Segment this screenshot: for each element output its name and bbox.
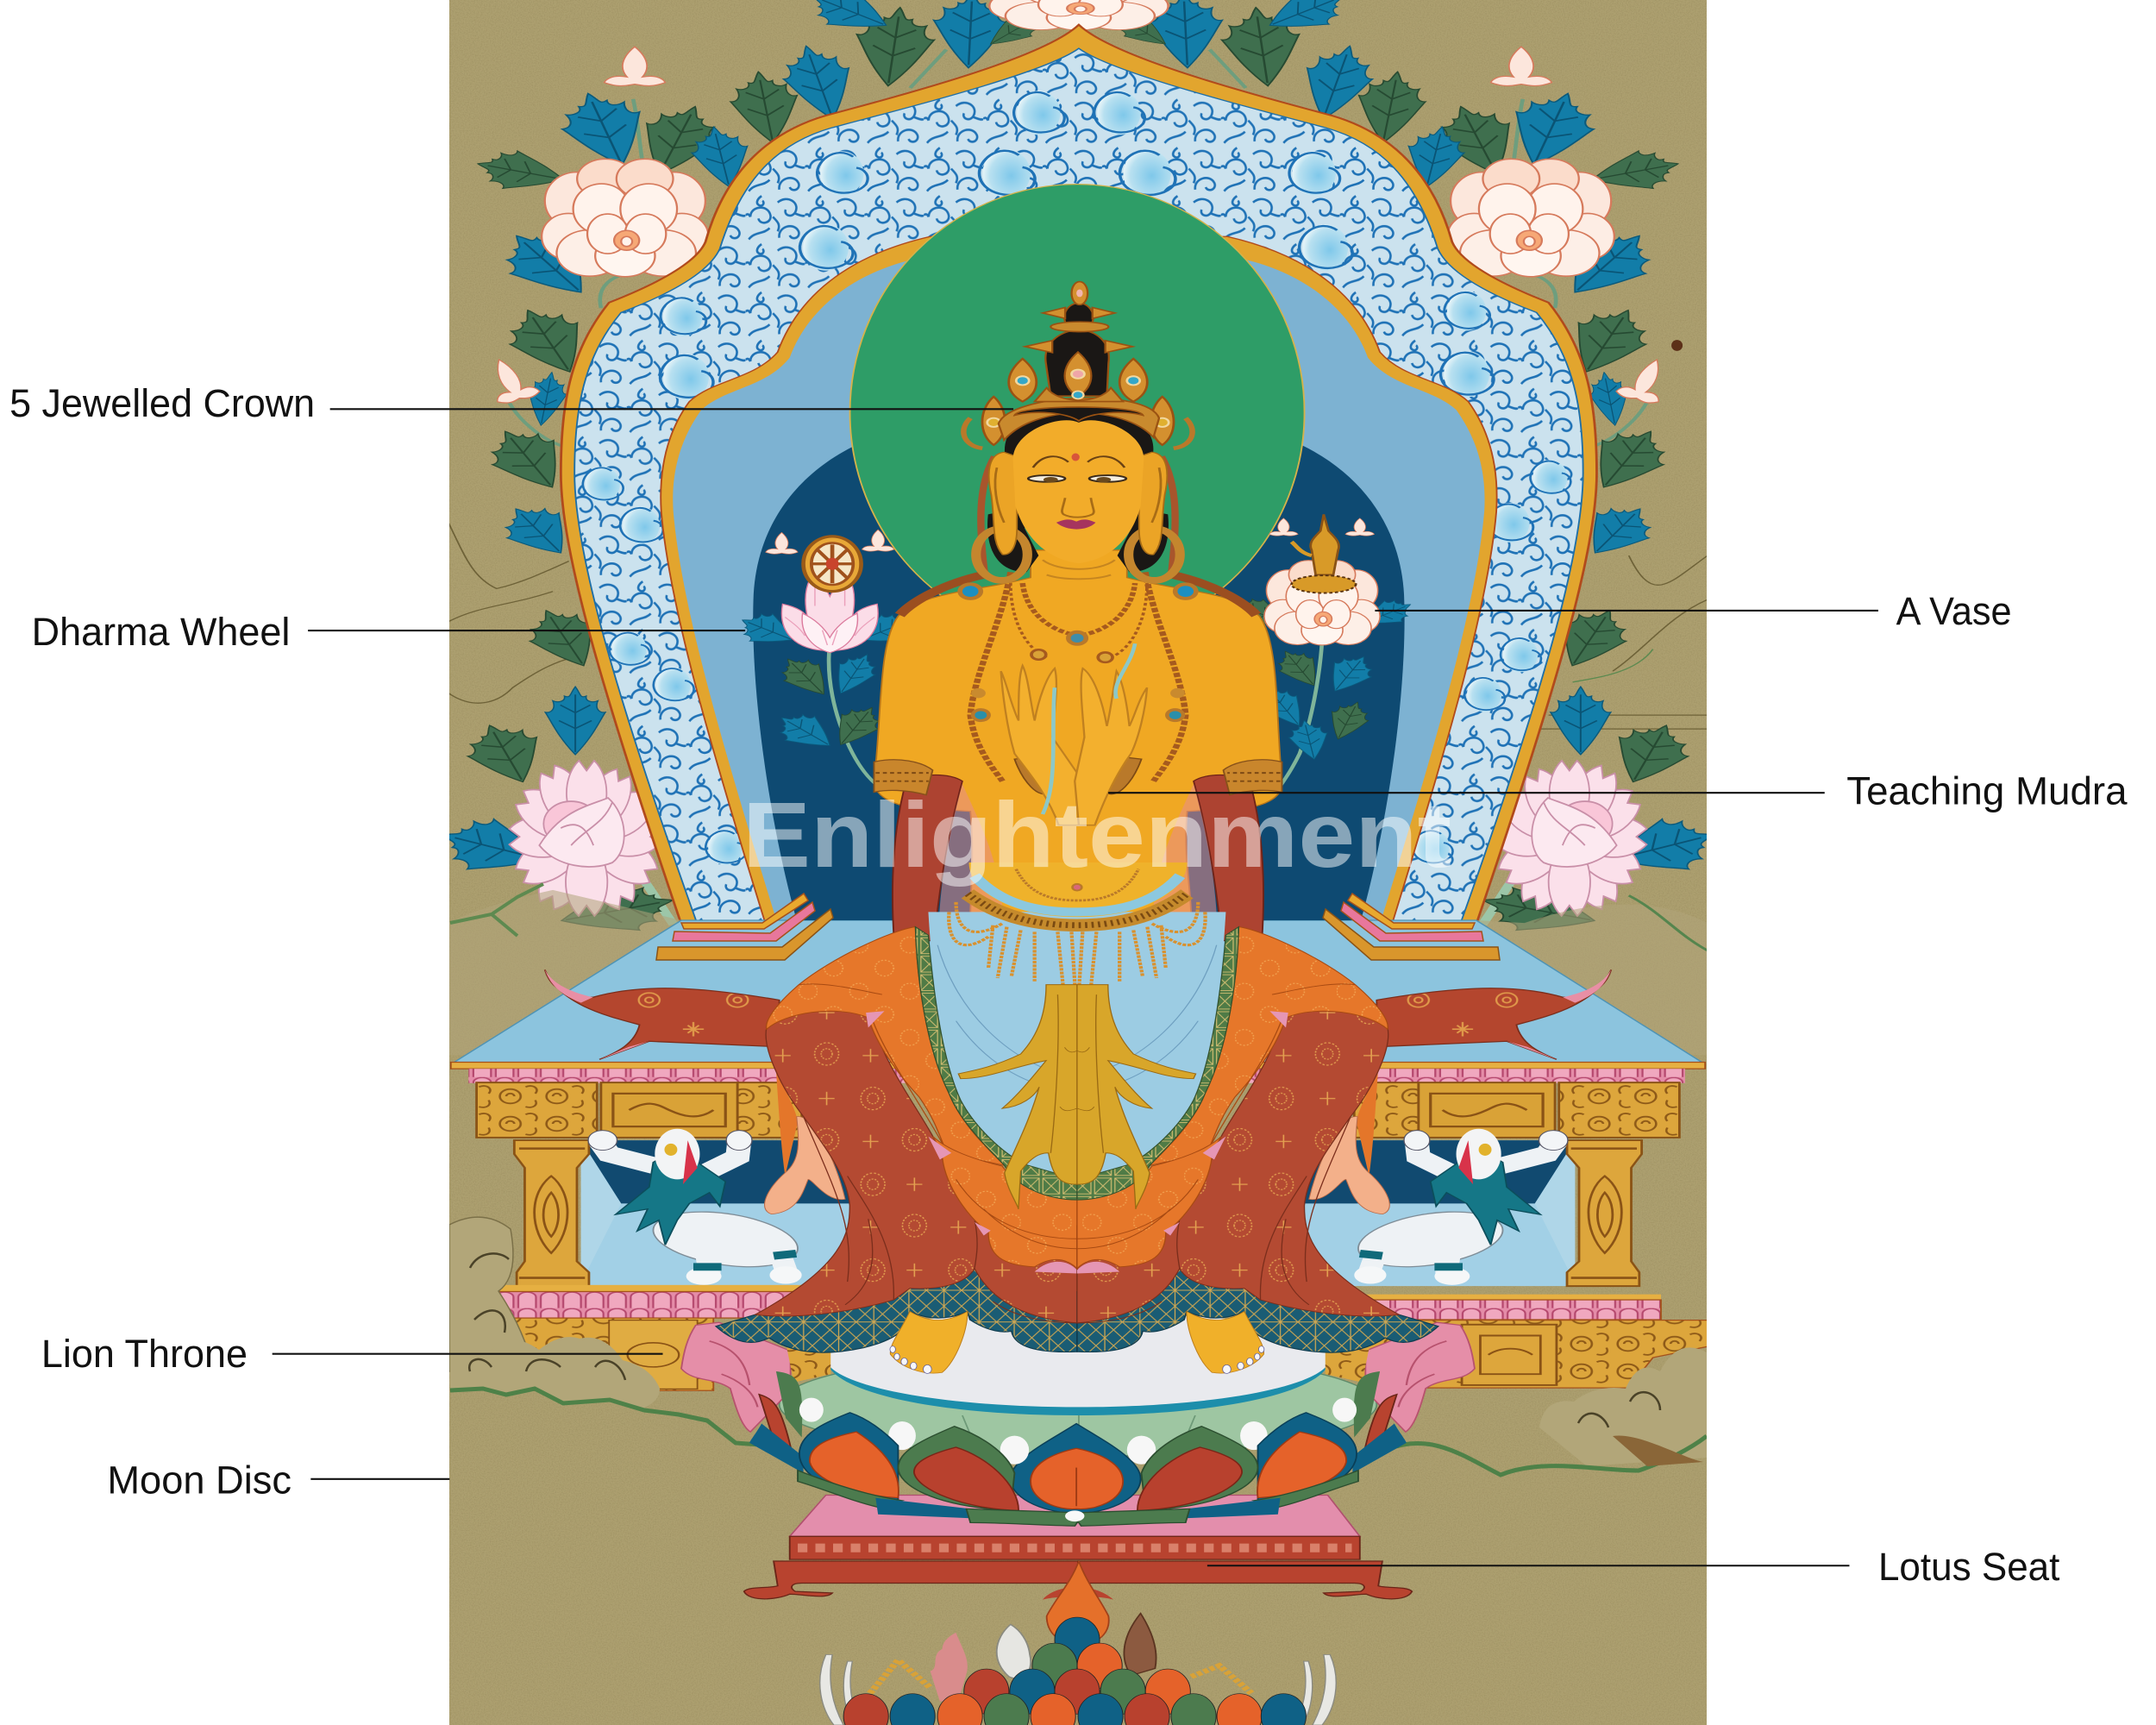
garment drape lines — [937, 945, 1217, 1094]
pink base of lotus seat — [790, 1495, 1360, 1536]
icon: five jewelled crown — [999, 282, 1159, 440]
icon: brown spot on ground — [1671, 340, 1683, 351]
offering flame — [1047, 1561, 1109, 1647]
lotus stem threads in hands — [1043, 643, 1135, 814]
dharma wheel flower — [742, 530, 895, 784]
clouds left — [449, 884, 759, 1445]
figure upper body — [874, 282, 1282, 941]
watermark: Enlightenment: Enlightenment — [743, 782, 1451, 887]
label: Teaching Mudra: Teaching Mudra — [1846, 769, 2128, 813]
central red lap fill edge — [993, 1302, 1162, 1323]
label: A Vase: A Vase — [1896, 589, 2012, 633]
throne gold frieze and lions left — [477, 969, 854, 1286]
figure lower body: robes — [716, 862, 1438, 1373]
jewelled girdle — [968, 869, 1187, 925]
lion throne lower tiers — [495, 1285, 1708, 1390]
arch inner gold frame — [661, 236, 1497, 925]
white centre petal tip — [1065, 1510, 1084, 1521]
lotus seat — [681, 1314, 1475, 1725]
label: 5 Jewelled Crown: 5 Jewelled Crown — [9, 381, 315, 425]
torso and arms — [874, 550, 1282, 919]
face — [1013, 420, 1144, 579]
throne gold frieze and lions right — [1302, 969, 1679, 1286]
pedestal right — [1323, 894, 1500, 960]
dark blue niche — [753, 429, 1405, 925]
green halo — [850, 185, 1305, 641]
pale waist band — [975, 875, 1180, 912]
moon disc cushion layers — [780, 1314, 1376, 1457]
vase flower — [1249, 514, 1411, 785]
labels and leader lines — [9, 381, 2128, 1589]
lower garment pale blue — [928, 912, 1225, 1179]
necklaces — [1011, 583, 1147, 662]
offerings: shell and coral — [870, 1614, 1251, 1702]
arch inner light blue field — [673, 256, 1485, 925]
throne cornice — [451, 1063, 1705, 1083]
beaded red band of seat — [790, 1536, 1360, 1559]
platform top — [453, 920, 1703, 1063]
label: Moon Disc: Moon Disc — [107, 1458, 291, 1502]
seat centre curl — [1043, 1586, 1113, 1600]
central lotus petal — [1011, 1424, 1141, 1513]
landscape cracks and distant hills — [448, 523, 1708, 729]
arch scroll roundels — [583, 91, 1570, 865]
label: Lion Throne: Lion Throne — [41, 1332, 248, 1376]
painting layer: arch, foliage and halo — [430, 0, 1726, 943]
offerings: stack of jewels — [843, 1617, 1306, 1725]
painting: background ground — [430, 0, 1726, 1725]
icon: teaching mudra hands — [1001, 666, 1147, 825]
niche lower part — [802, 862, 1351, 920]
arm, ear and crown side ornaments left — [874, 359, 1050, 941]
label: Dharma Wheel: Dharma Wheel — [32, 610, 290, 654]
robe right half — [1077, 902, 1438, 1373]
pedestal left — [656, 894, 833, 960]
ground hills — [448, 890, 1708, 1055]
arm, ear and crown side ornaments right — [1106, 359, 1282, 941]
robe left half — [716, 902, 1077, 1373]
arch outer gold frame — [561, 25, 1596, 925]
belly — [969, 862, 1187, 917]
foliage and peonies right — [1106, 0, 1726, 943]
lotus petals left half — [681, 1322, 1078, 1725]
arch scroll band — [574, 48, 1583, 925]
head hair backing — [1005, 404, 1153, 528]
golden centre sash left — [958, 985, 1077, 1209]
top lotus — [989, 0, 1169, 30]
clouds right and rock — [1388, 1347, 1707, 1475]
lotus petals right half — [1078, 1322, 1475, 1725]
golden centre sash right — [1077, 985, 1196, 1209]
throne layer — [448, 862, 1708, 1390]
label: Lotus Seat: Lotus Seat — [1878, 1545, 2060, 1589]
foliage and peonies left — [430, 0, 1050, 943]
